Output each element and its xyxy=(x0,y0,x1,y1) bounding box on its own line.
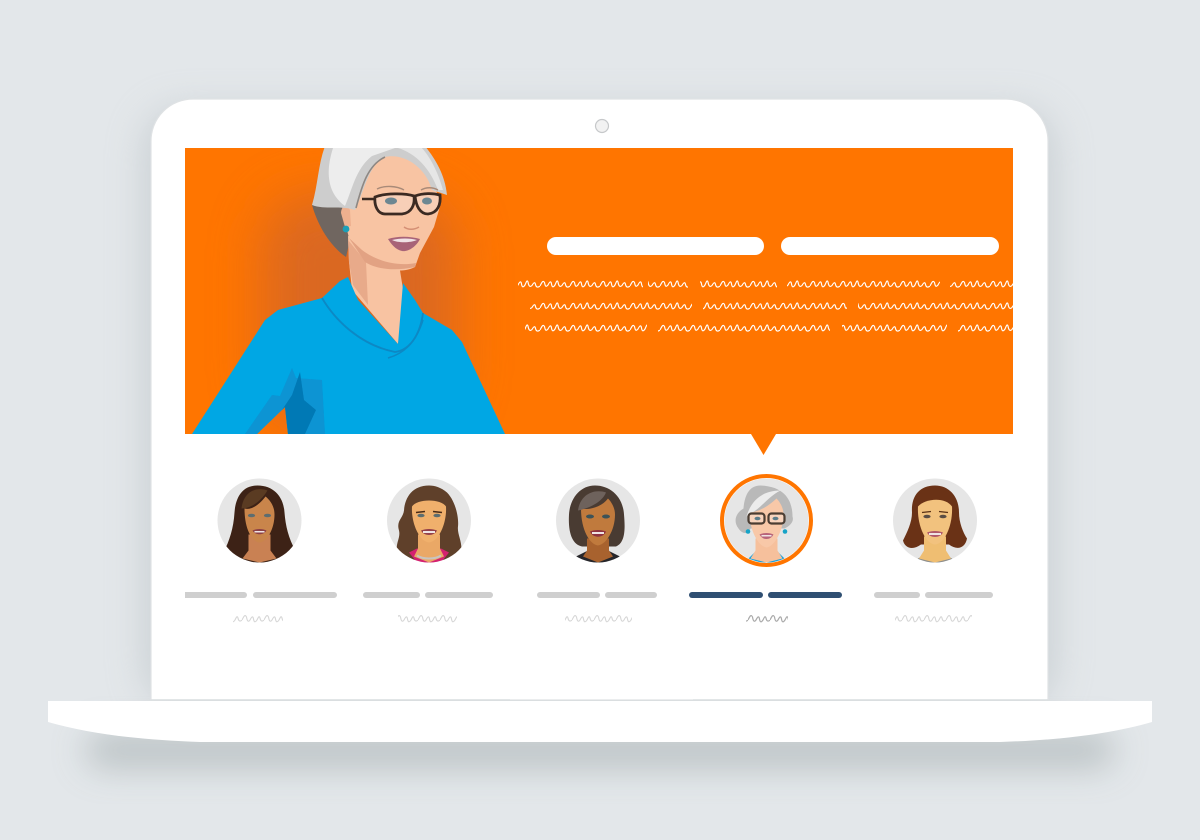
name bars xyxy=(185,592,993,598)
sweater folds xyxy=(245,368,325,434)
soft shadows xyxy=(85,108,1115,768)
name scribbles xyxy=(233,611,972,625)
laptop lid xyxy=(151,99,1048,700)
orange banner xyxy=(185,146,1013,434)
jaw shadow xyxy=(349,238,416,269)
handwritten paragraph scribble xyxy=(518,280,1013,332)
selection ring xyxy=(722,476,811,565)
avatar 3 xyxy=(556,478,640,562)
glasses xyxy=(362,194,440,214)
laptop illustration scene xyxy=(48,100,1152,782)
ear xyxy=(341,207,351,227)
laptop base xyxy=(48,700,1152,742)
heading placeholder bars xyxy=(547,237,999,255)
back hair xyxy=(312,205,352,257)
avatar 2 xyxy=(387,478,471,562)
avatar 5 xyxy=(893,478,977,562)
sweater collar shading xyxy=(322,298,423,352)
brows xyxy=(377,186,438,190)
banner pointer xyxy=(751,434,776,455)
earring xyxy=(343,226,349,232)
silver hair xyxy=(312,146,447,210)
nose xyxy=(404,227,419,229)
character: woman with grey hair and glasses xyxy=(192,146,505,434)
sweater xyxy=(192,277,505,434)
webcam xyxy=(596,120,608,132)
avatar 1 xyxy=(218,478,302,562)
mouth xyxy=(388,237,420,251)
banner glow xyxy=(262,195,457,425)
eyes xyxy=(385,198,397,204)
neck xyxy=(348,236,405,344)
face xyxy=(342,150,441,271)
avatar 4: selected xyxy=(722,476,811,565)
